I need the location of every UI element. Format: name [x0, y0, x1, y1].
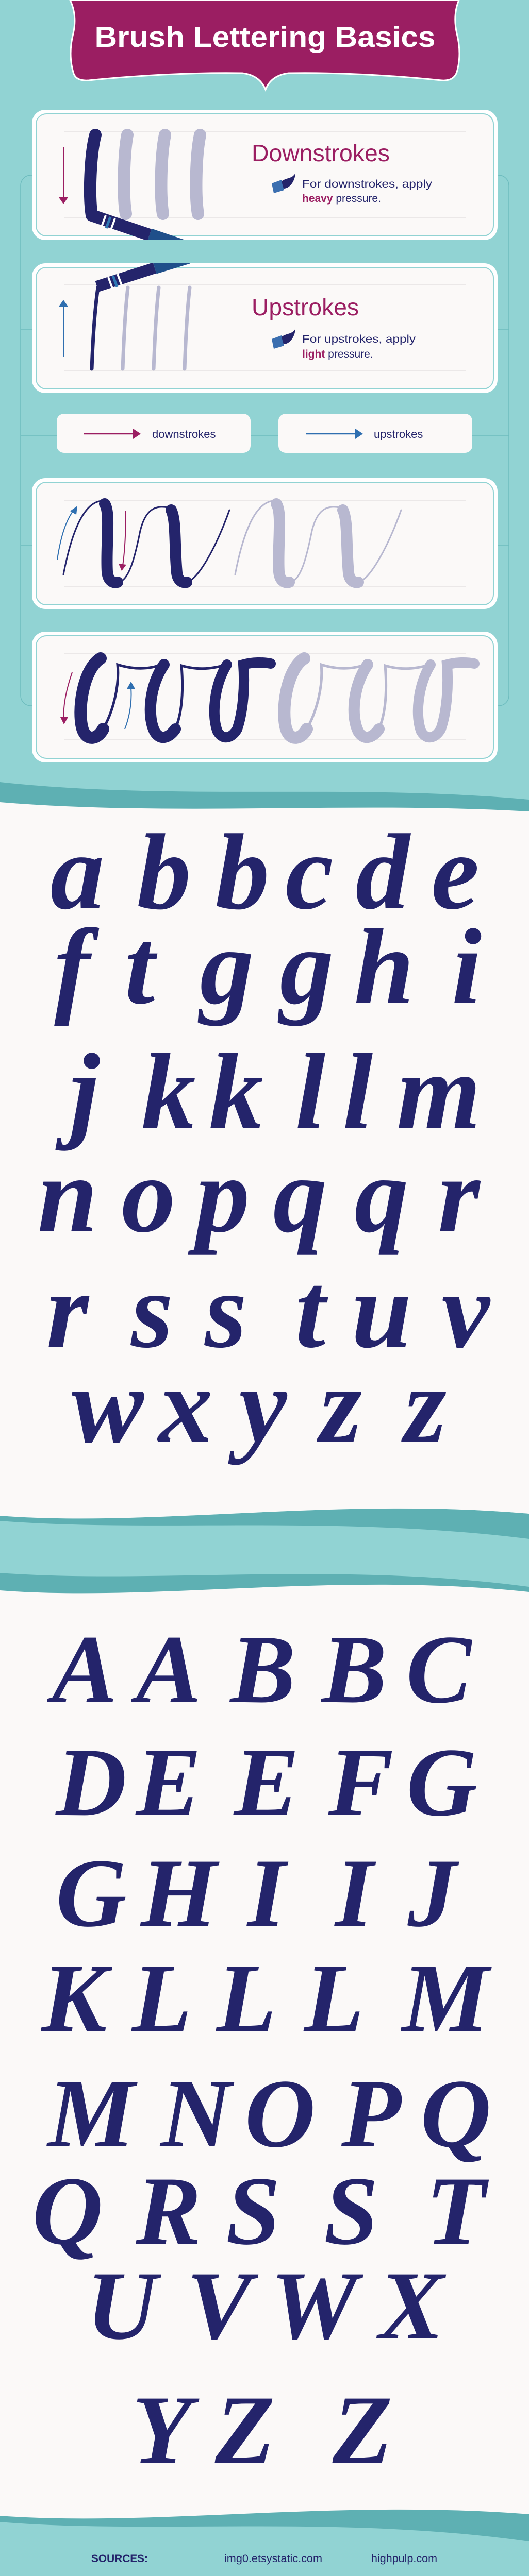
- row: w x y z z: z: [317, 1346, 362, 1465]
- row: Y Z Z: Y: [132, 2376, 200, 2484]
- row: w x y z z: x: [157, 1346, 212, 1465]
- row: G H I I J: [56, 1839, 460, 1947]
- text block: [302, 178, 433, 205]
- row: A A B B C: A: [47, 1616, 117, 1724]
- row: a b b c d e: a: [51, 812, 104, 932]
- row: n o p q q r: r: [438, 1136, 481, 1255]
- strokes: heavy: [90, 135, 200, 215]
- row: f t g g h i: f: [54, 907, 100, 1027]
- row: U V W X: [86, 2252, 447, 2360]
- row: r s s t u v: r: [46, 1251, 90, 1370]
- title banner: [70, 0, 459, 90]
- sources: SOURCES:: [91, 2553, 148, 2565]
- row: w x y z z: w: [72, 1346, 144, 1465]
- row: n o p q q r: q: [355, 1136, 408, 1255]
- row: U V W X: V: [187, 2252, 259, 2360]
- row: A A B B C: B: [321, 1616, 387, 1724]
- text block: For downstrokes, apply: [302, 178, 433, 190]
- row: w x y z z: z: [401, 1346, 447, 1465]
- strokes: light: [92, 287, 190, 369]
- sources: img0.etsystatic.com: [224, 2553, 322, 2565]
- heading: Upstrokes: Upstrokes: [252, 294, 359, 320]
- text block: light pressure.: [302, 348, 373, 360]
- row: D E E F G: D: [55, 1728, 127, 1837]
- row: a b b c d e: d: [356, 812, 411, 932]
- arrow: up: [57, 506, 77, 560]
- row: K L L L M: [41, 1944, 492, 2053]
- lowercase alphabet: [38, 812, 491, 1465]
- row: r s s t u v: v: [441, 1251, 491, 1370]
- row: f t g g h i: g: [277, 907, 334, 1027]
- arrow: down: [60, 672, 72, 724]
- row: D E E F G: F: [328, 1728, 393, 1837]
- row: K L L L M: L: [131, 1944, 192, 2053]
- row: M N O P Q: N: [159, 2060, 234, 2168]
- row: Y Z Z: Z: [332, 2376, 392, 2484]
- legend: downstrokes: [57, 414, 251, 453]
- row: a b b c d e: [51, 812, 480, 932]
- uppercase alphabet: [32, 1616, 492, 2484]
- row: a b b c d e: e: [431, 812, 480, 932]
- row: Q R S S T: S: [324, 2157, 378, 2265]
- legend: upstrokes: [278, 414, 472, 453]
- row: Q R S S T: S: [226, 2157, 280, 2265]
- row: G H I I J: I: [334, 1839, 376, 1947]
- text block: For upstrokes, apply: [302, 333, 416, 345]
- row: f t g g h i: g: [198, 907, 254, 1027]
- row: n o p q q r: n: [38, 1136, 97, 1255]
- row: n o p q q r: [38, 1136, 481, 1255]
- icon: brush pen: [92, 215, 186, 247]
- row: r s s t u v: s: [204, 1251, 247, 1370]
- row: j k k l l m: k: [209, 1032, 263, 1151]
- panel: n-strokes: [32, 478, 498, 609]
- row: n o p q q r: q: [273, 1136, 327, 1255]
- row: K L L L M: L: [216, 1944, 276, 2053]
- row: a b b c d e: b: [137, 812, 191, 932]
- icon: brush: [272, 173, 295, 193]
- row: U V W X: X: [376, 2252, 447, 2360]
- arrow: down: [59, 147, 68, 204]
- row: Y Z Z: Z: [214, 2376, 275, 2484]
- strokes: dark n: [63, 501, 229, 583]
- row: Y Z Z: [132, 2376, 392, 2484]
- title text: Brush Lettering Basics: [95, 21, 435, 54]
- arrow: down: [119, 511, 126, 571]
- row: K L L L M: L: [303, 1944, 364, 2053]
- row: r s s t u v: [46, 1251, 491, 1370]
- row: j k k l l m: j: [55, 1032, 100, 1151]
- row: j k k l l m: m: [396, 1032, 481, 1151]
- row: w x y z z: [72, 1346, 447, 1465]
- row: M N O P Q: M: [46, 2060, 138, 2168]
- row: f t g g h i: t: [125, 907, 158, 1027]
- row: r s s t u v: u: [352, 1251, 411, 1370]
- row: A A B B C: C: [406, 1616, 473, 1724]
- row: D E E F G: G: [406, 1728, 477, 1837]
- row: Q R S S T: Q: [32, 2157, 103, 2265]
- row: j k k l l m: l: [295, 1032, 326, 1151]
- row: M N O P Q: P: [341, 2060, 402, 2168]
- row: U V W X: W: [271, 2252, 364, 2360]
- row: a b b c d e: c: [285, 812, 334, 932]
- sources: [91, 2553, 437, 2565]
- panel: downstrokes: [32, 110, 498, 247]
- icon: brush: [272, 329, 295, 349]
- sources: highpulp.com: [371, 2553, 437, 2565]
- row: M N O P Q: O: [244, 2060, 316, 2168]
- strokes: light loops: [284, 658, 474, 738]
- row: D E E F G: E: [135, 1728, 201, 1837]
- row: f t g g h i: h: [354, 907, 414, 1027]
- row: Q R S S T: R: [136, 2157, 201, 2265]
- row: Q R S S T: T: [426, 2157, 489, 2265]
- row: A A B B C: [47, 1616, 473, 1724]
- row: U V W X: U: [86, 2252, 161, 2360]
- row: G H I I J: I: [246, 1839, 289, 1947]
- legend: upstrokes: upstrokes: [374, 428, 423, 440]
- row: A A B B C: A: [131, 1616, 201, 1724]
- arrow: up: [59, 300, 68, 357]
- row: j k k l l m: [55, 1032, 481, 1151]
- row: Q R S S T: [32, 2157, 489, 2265]
- legend: downstrokes: downstrokes: [152, 428, 216, 440]
- row: G H I I J: J: [407, 1839, 460, 1947]
- text block: heavy pressure.: [302, 193, 381, 205]
- row: K L L L M: M: [401, 1944, 492, 2053]
- text block: [302, 333, 416, 360]
- row: K L L L M: K: [41, 1944, 113, 2053]
- row: M N O P Q: [46, 2060, 491, 2168]
- arrow: up: [125, 682, 135, 729]
- row: r s s t u v: t: [295, 1251, 328, 1370]
- row: j k k l l m: l: [343, 1032, 373, 1151]
- icon: brush pen: [97, 258, 188, 289]
- row: r s s t u v: s: [130, 1251, 173, 1370]
- row: M N O P Q: Q: [420, 2060, 491, 2168]
- row: f t g g h i: i: [452, 907, 482, 1027]
- row: w x y z z: y: [227, 1346, 287, 1465]
- row: n o p q q r: o: [122, 1136, 175, 1255]
- strokes: dark loops: [80, 658, 271, 738]
- row: G H I I J: H: [140, 1839, 220, 1947]
- strokes: light n: [235, 501, 401, 583]
- panel: upstrokes: [32, 258, 498, 393]
- row: D E E F G: [55, 1728, 477, 1837]
- row: a b b c d e: b: [216, 812, 269, 932]
- row: f t g g h i: [54, 907, 482, 1027]
- row: D E E F G: E: [233, 1728, 299, 1837]
- row: n o p q q r: p: [188, 1136, 250, 1255]
- row: A A B B C: B: [229, 1616, 295, 1724]
- row: j k k l l m: k: [141, 1032, 196, 1151]
- panel: loop strokes: [32, 632, 498, 762]
- heading: Downstrokes: Downstrokes: [252, 140, 390, 166]
- row: G H I I J: G: [56, 1839, 127, 1947]
